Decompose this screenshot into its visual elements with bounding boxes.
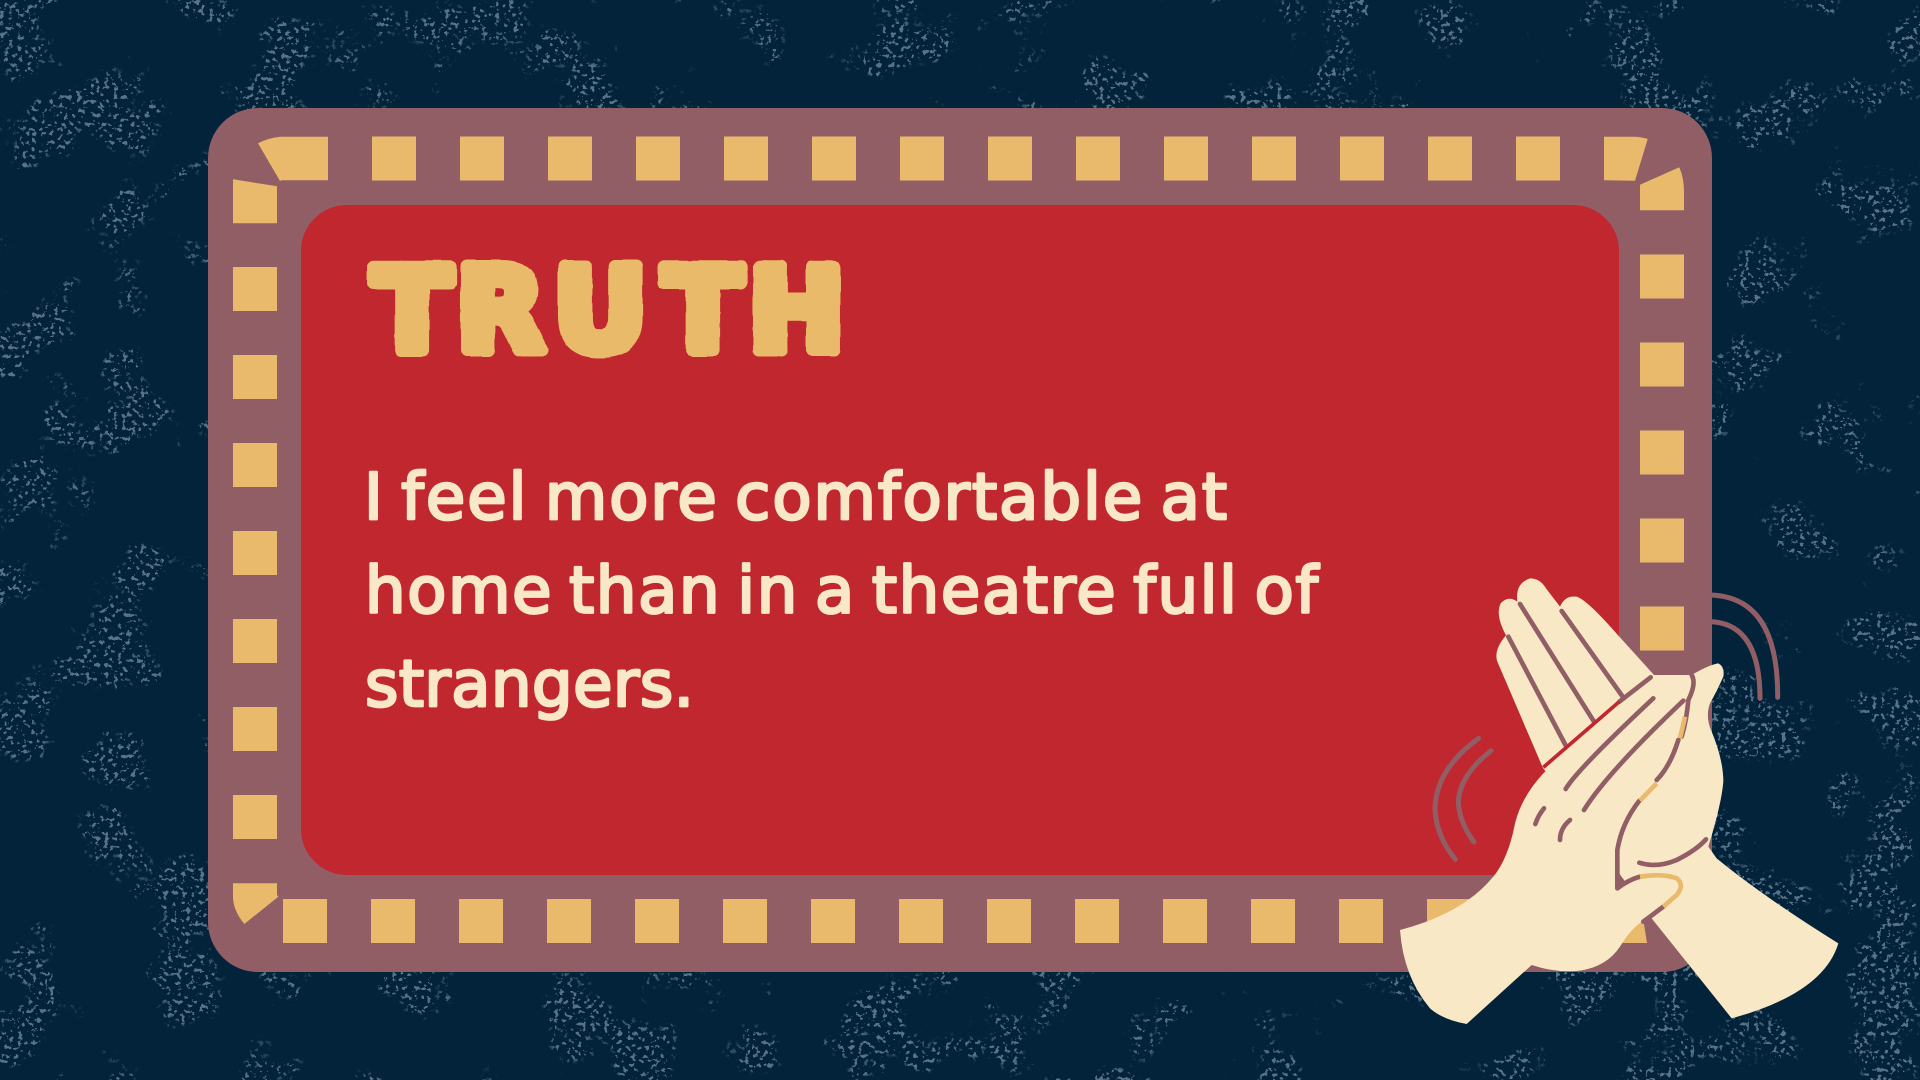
text block: statement: I feel more comfortable at <box>364 461 1227 535</box>
left top corner light <box>233 179 277 223</box>
gap between hands <box>1543 702 1619 767</box>
text block: statement: strangers. <box>365 648 694 722</box>
finger and palm lines <box>1508 604 1706 922</box>
bottom-left corner light <box>233 883 278 924</box>
front hand with thumb and wrist <box>1400 676 1693 1024</box>
heading: TRUTH: TRUTH <box>373 244 844 377</box>
bottom row lights <box>283 899 1559 943</box>
right top corner light <box>1640 167 1684 210</box>
back hand with fingers, palm and wrist <box>1496 578 1838 1018</box>
bottom-right corner light <box>1603 899 1647 943</box>
panel: red card <box>301 205 1619 875</box>
marquee lights: gold squares around frame <box>233 136 1684 943</box>
motion arcs right <box>1710 595 1778 698</box>
top row lights <box>372 136 1560 180</box>
text block: statement <box>364 461 1319 722</box>
top-right corner light <box>1604 137 1648 181</box>
motion arcs left <box>1435 738 1491 859</box>
top-left corner light <box>258 137 328 181</box>
left column lights <box>233 267 277 839</box>
gold see-through line segments <box>1640 717 1685 907</box>
text block: statement: home than in a theatre full of <box>365 554 1319 628</box>
panel: marquee frame <box>208 108 1712 972</box>
icon: clapping hands <box>1400 578 1838 1024</box>
right column lights <box>1640 254 1684 826</box>
